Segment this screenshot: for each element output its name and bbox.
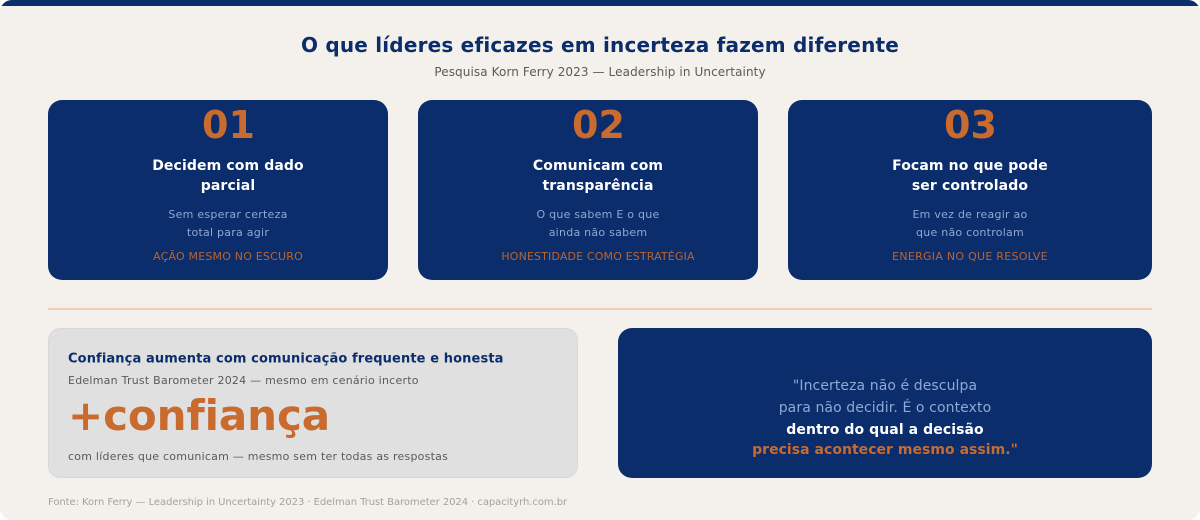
card 01 heading: parcial <box>201 178 255 194</box>
card 03 heading: Focam no que pode <box>892 158 1048 174</box>
card 02 description: O que sabem E o que <box>537 208 659 221</box>
quote line 2: para não decidir. É o contexto <box>779 399 991 416</box>
confiança caption: com líderes que comunicam — mesmo sem ter todas as respostas <box>68 450 448 463</box>
card 02 description: ainda não sabem <box>549 226 647 239</box>
panel: confiança <box>48 328 578 478</box>
card 01 description: Sem esperar certeza <box>168 208 288 221</box>
card 03 number: 03 <box>944 103 997 147</box>
title: O que líderes eficazes em incerteza fazem diferente <box>301 33 899 57</box>
panel: card 02 <box>418 100 758 280</box>
card 03 heading: ser controlado <box>912 178 1028 194</box>
big word: +confiança <box>68 391 330 440</box>
card 03 description: que não controlam <box>916 226 1024 239</box>
quote line 4: precisa acontecer mesmo assim." <box>752 442 1018 458</box>
card 01 number: 01 <box>202 103 255 147</box>
card 03 tag: ENERGIA NO QUE RESOLVE <box>892 250 1048 263</box>
panel: card 03 <box>788 100 1152 280</box>
card 01 description: total para agir <box>187 226 269 239</box>
footer source: Fonte: Korn Ferry — Leadership in Uncertainty 2023 · Edelman Trust Barometer 2024 · capacityrh.com.br <box>48 497 568 508</box>
card 02 heading: transparência <box>542 178 654 194</box>
quote line 3: dentro do qual a decisão <box>786 422 984 438</box>
card 02 number: 02 <box>572 103 625 147</box>
card 01 heading: Decidem com dado <box>152 158 304 174</box>
panel: quote <box>618 328 1152 478</box>
card 02 heading: Comunicam com <box>533 158 663 174</box>
card 02 tag: HONESTIDADE COMO ESTRATÉGIA <box>501 250 695 263</box>
quote line 1: "Incerteza não é desculpa <box>793 378 977 394</box>
top bar <box>0 0 1200 6</box>
card 01 tag: AÇÃO MESMO NO ESCURO <box>153 250 303 263</box>
subtitle: Pesquisa Korn Ferry 2023 — Leadership in Uncertainty <box>434 65 766 79</box>
panel: card 01 <box>48 100 388 280</box>
confiança heading: Confiança aumenta com comunicação frequente e honesta <box>68 352 504 366</box>
confiança source: Edelman Trust Barometer 2024 — mesmo em cenário incerto <box>68 374 419 387</box>
card 03 description: Em vez de reagir ao <box>912 208 1028 221</box>
